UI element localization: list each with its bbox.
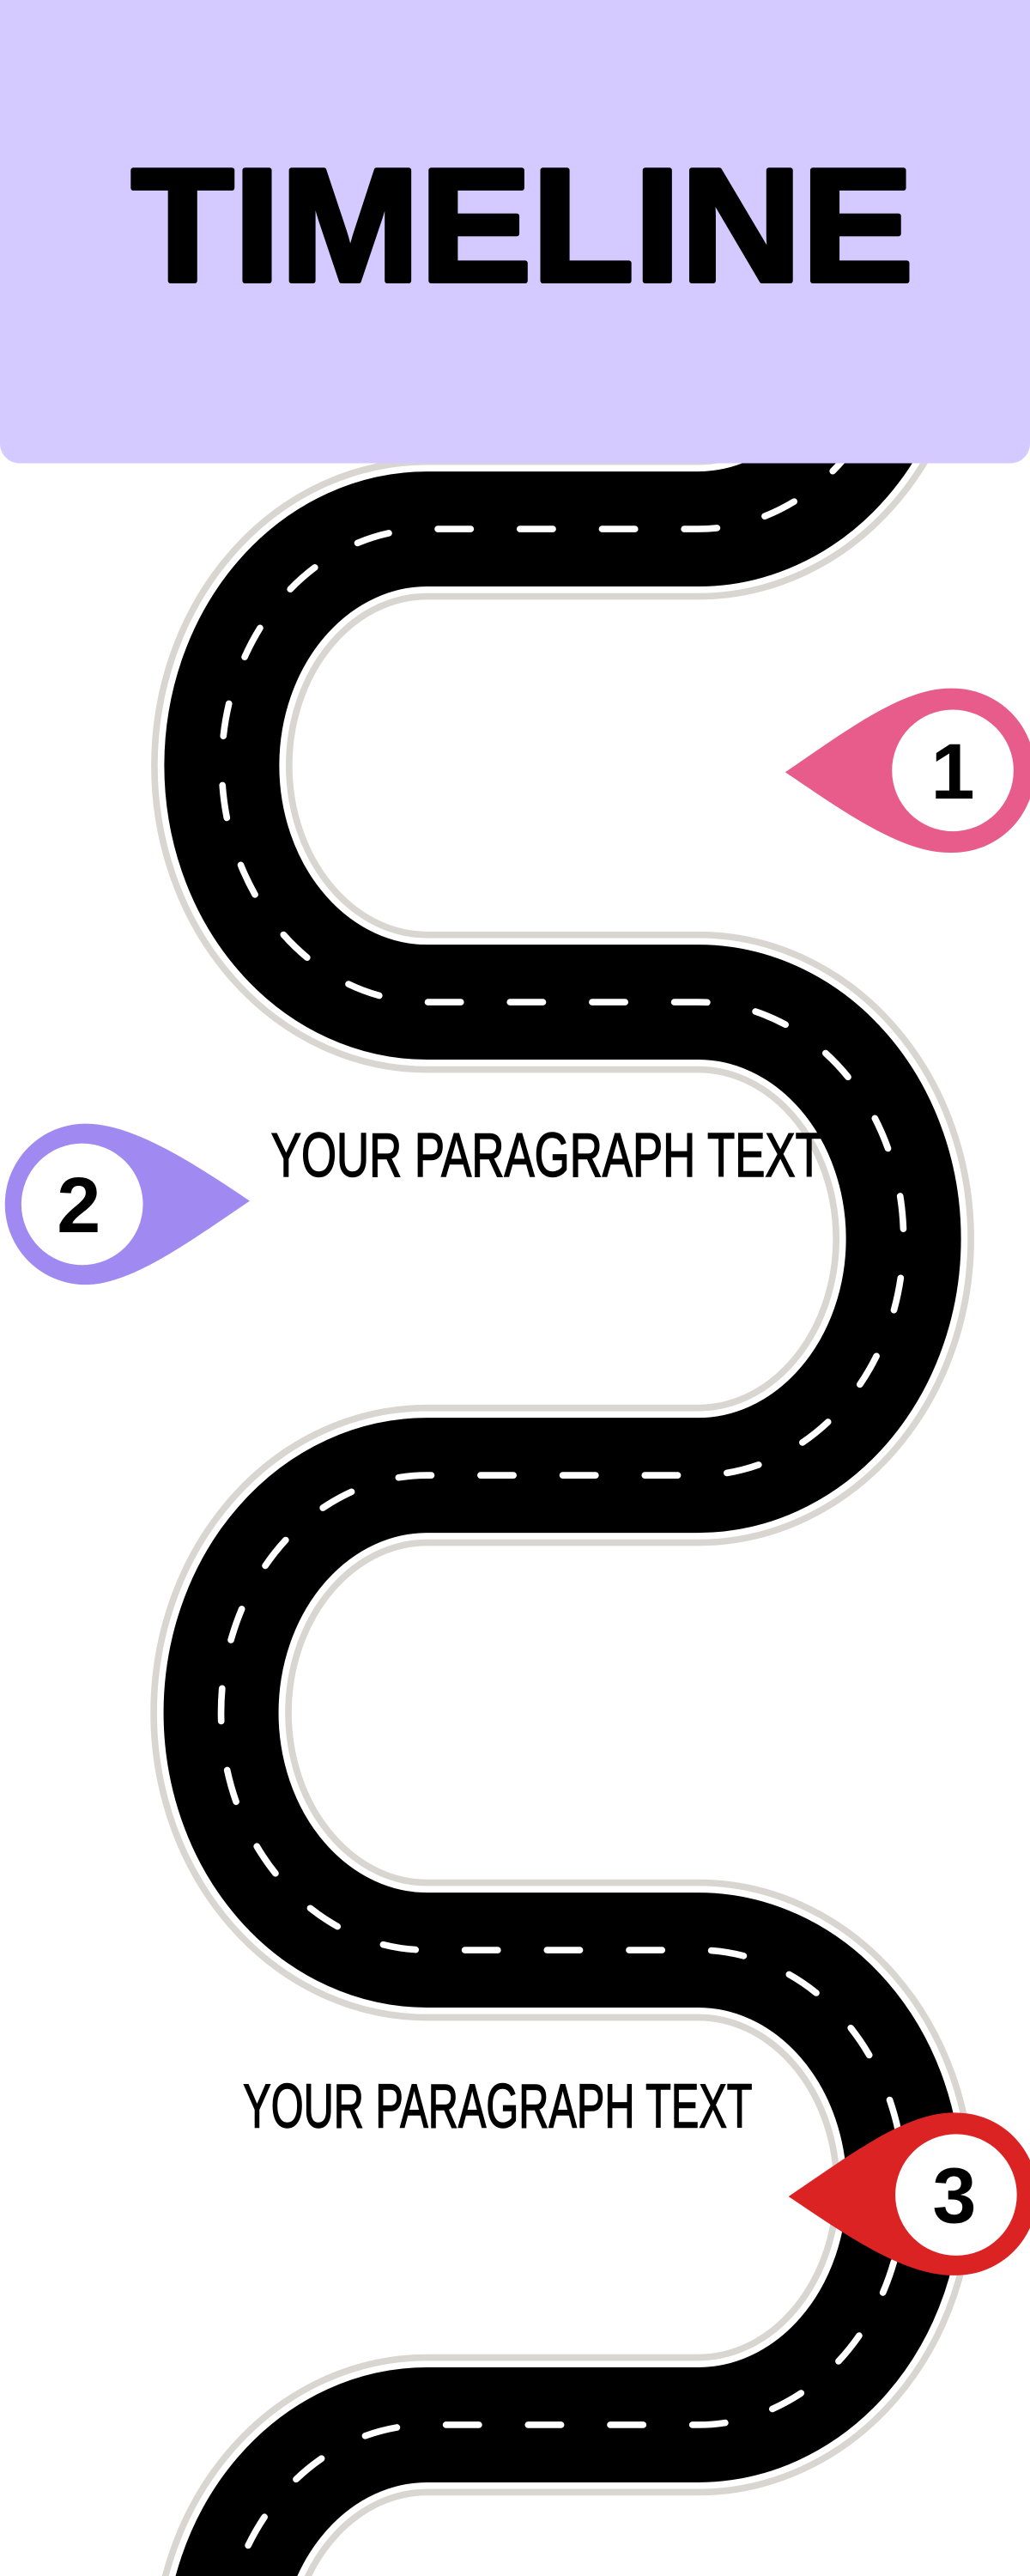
- marker 2: [5, 1124, 250, 1285]
- title: TIMELINE: [131, 135, 913, 315]
- marker 1: 1: [930, 728, 975, 816]
- paragraph text 2: YOUR PARAGRAPH TEXT: [243, 2072, 753, 2142]
- paragraph text 1: YOUR PARAGRAPH TEXT: [271, 1121, 823, 1190]
- winding road: [221, 293, 904, 2576]
- marker 3: 3: [932, 2153, 977, 2240]
- header panel: [0, 0, 1030, 464]
- marker 3: [789, 2112, 1030, 2275]
- marker 2: 2: [57, 1162, 100, 1249]
- marker 1: [785, 689, 1030, 853]
